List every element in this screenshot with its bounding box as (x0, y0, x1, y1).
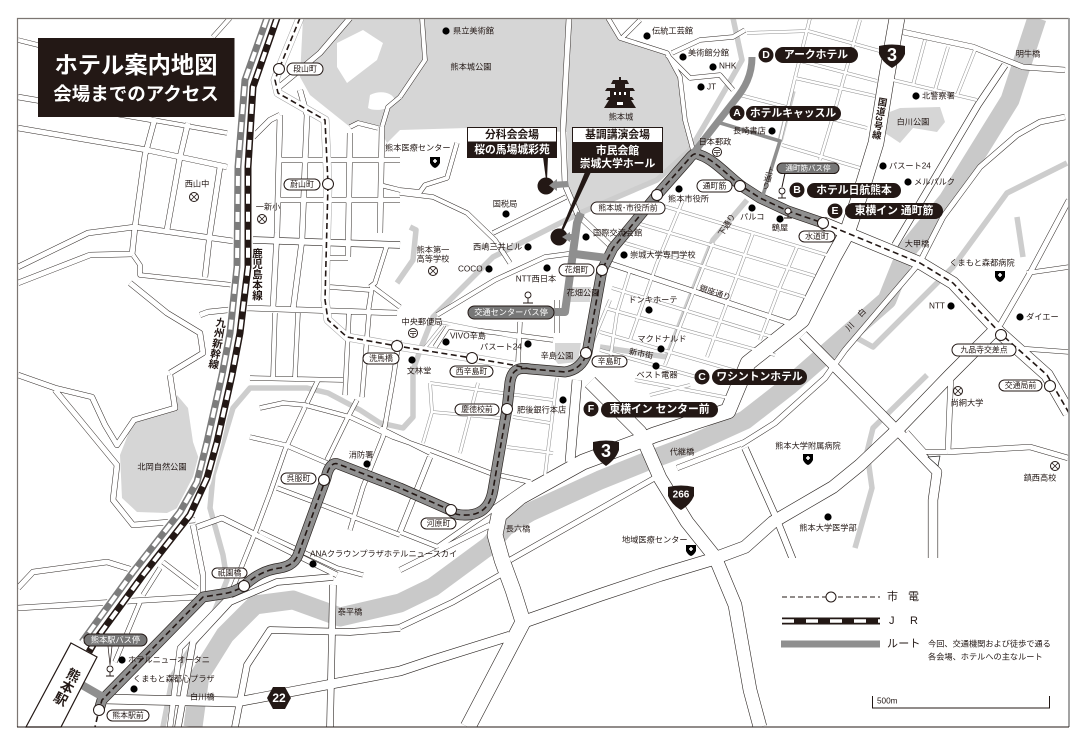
hotel: E 東横イン 通町筋: E (831, 205, 839, 217)
hotel: D アークホテル (758, 47, 858, 63)
POI: 国際交流会館: 国際交流会館 (593, 228, 642, 238)
hotel: D アークホテル: アークホテル (784, 48, 848, 61)
river: Tsuboi and canals (163, 18, 1067, 727)
legend: streetcar: 市 (887, 590, 898, 603)
stop label: 蔚山町: 蔚山町 (290, 179, 314, 189)
park label: 花畑公園: 花畑公園 (567, 288, 599, 298)
POI: 中央郵便局: 中央郵便局 (402, 316, 442, 326)
POI: 鶴屋 (772, 215, 788, 232)
stop label: 段山町 (287, 63, 323, 75)
hotel: F 東横イン センター前: 東横イン センター前 (609, 402, 710, 416)
stop label: 祇園橋: 祇園橋 (218, 568, 241, 578)
legend background (752, 558, 1069, 727)
stop label: 通町筋 (697, 180, 732, 192)
POI: NTT西日本: NTT西日本 (516, 274, 556, 284)
title box (38, 38, 234, 117)
JR Kagoshima main line track (89, 18, 277, 652)
POI: 消防署 (349, 450, 373, 468)
hotel: E 東横イン 通町筋: 東横イン 通町筋 (855, 203, 933, 217)
park: Shirakawa park (885, 107, 945, 143)
POI: ドンキホーテ: ドンキホーテ (628, 296, 678, 304)
POI: 地域医療センター (622, 534, 696, 556)
POI: 文林堂 (407, 356, 431, 376)
POI: ホテルニューオータニ: ホテルニューオータニ (128, 656, 210, 664)
POI: VIVO辛島: VIVO辛島 (450, 330, 486, 340)
POI: 中央郵便局 (402, 316, 442, 338)
park: Kumamoto castle grounds (300, 18, 690, 215)
stop label: 慶徳校前: 慶徳校前 (461, 404, 493, 414)
park: Karashima and Hanabata (555, 287, 591, 364)
stop label: 蔚山町 (284, 179, 320, 190)
stop label: 段山町: 段山町 (293, 64, 317, 74)
route shield: 266 (668, 486, 694, 510)
POI: 熊本第一高等学校: 高等学校 (417, 254, 449, 264)
POI: 熊本第一高等学校: 熊本第一 (417, 244, 449, 254)
hotel: C ワシントンホテル (694, 369, 807, 385)
stop label: 花畑町 (559, 264, 594, 276)
legend: route (781, 638, 921, 650)
river: Shirakawa (193, 18, 1037, 727)
POI: 尚絅大学 (951, 386, 983, 408)
POI: 日本郵政: 日本郵政 (699, 136, 731, 146)
castle icon (604, 77, 636, 108)
POI: 熊本市役所: 熊本市役所 (668, 194, 709, 204)
hotel: B ホテル日航熊本 (790, 182, 901, 198)
POI: 一新小 (256, 202, 280, 224)
hotel: D アークホテル: D (762, 49, 770, 61)
POI: くまもと森都心プラザ: くまもと森都心プラザ (133, 674, 215, 684)
stop label: 辛島町 (592, 356, 627, 367)
park label: 白川公園: 白川公園 (897, 116, 929, 126)
legend: streetcar (782, 590, 919, 603)
POI: 西山中: 西山中 (185, 178, 209, 188)
POI: 伝統工芸館: 伝統工芸館 (652, 26, 693, 36)
title box: ホテル案内地図 (54, 52, 218, 78)
POI: マクドナルド (637, 334, 687, 353)
stop label: 祇園橋 (212, 568, 247, 578)
river label: 白川: 白 (855, 306, 868, 319)
route shield: 3 south (593, 440, 619, 466)
venue label: 分科会会場: 分科会会場 (485, 127, 539, 141)
venue label: 基調講演会場: 市民会館 (596, 143, 639, 157)
bus stop: 交通センターバス停 (468, 292, 554, 319)
POI: 北警察署 (912, 90, 955, 100)
POI: 美術館分館 (679, 48, 729, 61)
bus stop: 熊本駅バス停: 熊本駅バス停 (91, 634, 140, 644)
legend: JR: J (889, 615, 894, 627)
stop label: 水道町 (799, 231, 835, 242)
POI: ANAクラウンプラザホテルニュースカイ (309, 550, 457, 568)
bus stop: 交通センターバス停: 交通センターバス停 (474, 307, 548, 317)
POI: ダイエー (1016, 312, 1059, 322)
route shield: 22: 22 (272, 691, 286, 705)
river label: 白川: 川 (844, 321, 856, 333)
legend: route description: 今回、交通機関および徒歩で通る (928, 638, 1051, 648)
street label: 上通り: 上通り (761, 165, 775, 191)
POI: 伝統工芸館 (643, 26, 693, 40)
park label: 北岡自然公園: 北岡自然公園 (137, 462, 187, 472)
venue label: 基調講演会場: 基調講演会場 (585, 127, 650, 141)
stop label: 熊本駅前: 熊本駅前 (112, 710, 144, 720)
route shield: 3 north: 3 (887, 45, 897, 65)
POI: マクドナルド: マクドナルド (637, 334, 687, 344)
Kumamoto station building (26, 643, 97, 727)
POI: 熊本大学附属病院 (775, 440, 841, 465)
POI: 西嶋三井ビル: 西嶋三井ビル (473, 242, 522, 252)
stop label: 洗馬橋 (363, 353, 399, 364)
bus stop symbol on route (784, 208, 792, 218)
hotel: A ホテルキャッスル: ホテルキャッスル (750, 106, 836, 120)
legend: JR: R (910, 615, 918, 627)
venue marker: 基調講演会場 (550, 172, 591, 246)
route shield: 3 north (879, 44, 905, 68)
legend: streetcar: 電 (908, 590, 919, 603)
route shield: 22 (267, 687, 291, 709)
stop label: 水道町: 水道町 (805, 231, 829, 241)
POI: 崇城大学専門学校: 崇城大学専門学校 (630, 250, 696, 260)
scale bar (872, 696, 1050, 708)
venue label: 基調講演会場: 崇城大学ホール (580, 156, 655, 170)
rail corridor (102, 130, 256, 606)
POI: 熊本大学医学部: 熊本大学医学部 (799, 522, 857, 532)
stop label: 呉服町: 呉服町 (287, 474, 310, 483)
POI: 長崎書店 (733, 126, 776, 136)
castle lawn clearing (337, 30, 395, 110)
POI: NHK: NHK (719, 62, 737, 70)
POI: くまもと森都病院: くまもと森都病院 (949, 258, 1015, 268)
hotel: C ワシントンホテル: ワシントンホテル (716, 370, 803, 383)
stop label: 慶徳校前 (455, 404, 499, 415)
hotel: F 東横イン センター前 (584, 402, 718, 418)
bridge: 泰平橋: 泰平橋 (338, 606, 362, 616)
POI: 熊本大学附属病院: 熊本大学附属病院 (775, 440, 841, 450)
POI: NTT (929, 302, 955, 310)
POI: ベスト電器 (636, 362, 678, 380)
POI: 熊本第一高等学校 (417, 244, 449, 276)
POI: 熊本医療センター (385, 142, 451, 168)
stop label: 熊本城・市役所前: 熊本城･市役所前 (598, 202, 658, 212)
stop label: 河原町 (421, 518, 456, 529)
legend: route description (928, 638, 1051, 662)
POI: 肥後銀行本店: 肥後銀行本店 (517, 404, 566, 414)
bridge: 明牛橋: 明牛橋 (1016, 48, 1040, 58)
castle label: 熊本城 (609, 112, 633, 122)
POI: COCO: COCO (458, 264, 483, 274)
POI: 長崎書店: 長崎書店 (733, 126, 766, 136)
rail label: 九州新幹線: 九州新幹線 (206, 316, 227, 371)
POI: 地域医療センター: 地域医療センター (622, 534, 688, 544)
bus stop: 通町筋バス停: 通町筋バス停 (786, 162, 831, 172)
hotel: B ホテル日航熊本: B (793, 184, 801, 196)
POI: NHK (709, 62, 737, 71)
stop label: 九品寺交差点: 九品寺交差点 (960, 344, 1008, 354)
route highlight (82, 57, 823, 710)
stop label: 花畑町: 花畑町 (565, 264, 588, 274)
POI: 一新小: 一新小 (256, 202, 280, 212)
road label: 国道3号線: 国道3号線 (870, 96, 888, 141)
POI: 熊本医療センター: 熊本医療センター (385, 142, 451, 152)
park label: 熊本城公園: 熊本城公園 (451, 62, 491, 72)
street label: 銀座通り: 銀座通り (698, 283, 732, 302)
legend: route description: 各会場、ホテルへの主なルート (928, 652, 1043, 662)
venue label: 基調講演会場 (572, 127, 663, 173)
POI: 文林堂: 文林堂 (407, 366, 431, 376)
bridge: 白川橋: 白川橋 (190, 692, 215, 702)
POI: くまもと森都心プラザ (130, 674, 215, 693)
POI: 肥後銀行本店 (517, 396, 567, 414)
POI: 鶴屋: 鶴屋 (772, 222, 788, 232)
POI: JT (697, 82, 716, 92)
venue label: 分科会会場 (467, 127, 557, 158)
hotel: A ホテルキャッスル: A (733, 107, 741, 119)
POI: 鎮西高校 (1024, 462, 1060, 482)
park: Kitaoka nature park (120, 395, 200, 513)
stop label: 辛島町: 辛島町 (598, 356, 621, 366)
legend: JR (782, 615, 918, 627)
POI: 国税局 (493, 198, 517, 218)
POI: NTT: NTT (929, 302, 945, 310)
POI: パルコ (740, 204, 764, 222)
stop label: 洗馬橋: 洗馬橋 (369, 353, 393, 363)
bridge: 代継橋: 代継橋 (670, 446, 694, 456)
stop label: 河原町: 河原町 (427, 519, 450, 528)
POI: ANAクラウンプラザホテルニュースカイ: ANAクラウンプラザホテルニュースカイ (310, 550, 457, 558)
POI: 国税局: 国税局 (493, 198, 517, 208)
street label: 下通り: 下通り (716, 212, 737, 238)
POI: ドンキホーテ (628, 296, 678, 314)
hotel: E 東横イン 通町筋 (828, 203, 943, 219)
POI: パルコ: パルコ (740, 212, 764, 222)
stop label: 交通局前 (999, 380, 1042, 391)
stop label: 九品寺交差点 (952, 344, 1016, 356)
POI: 西山中 (185, 178, 209, 202)
park label: 辛島公園: 辛島公園 (541, 350, 573, 360)
scale bar: 500m (877, 696, 898, 706)
legend (781, 590, 1051, 662)
river label: 白川 (844, 306, 868, 333)
POI: くまもと森都病院 (949, 258, 1015, 282)
stop label: 通町筋: 通町筋 (703, 180, 726, 190)
POI: パスート24: パスート24 (480, 342, 522, 352)
bus stop: 熊本駅バス停 (84, 634, 147, 676)
route shield: 266: 266 (673, 490, 690, 500)
bus stop: 通町筋バス停 (777, 162, 839, 198)
POI: 北警察署: 北警察署 (922, 90, 955, 100)
bridge: 長六橋: 長六橋 (506, 524, 530, 534)
JR Kyushu Shinkansen track (82, 18, 267, 642)
POI: 日本郵政 (699, 136, 731, 156)
POI: 国際交流会館 (582, 228, 642, 241)
POI: VIVO辛島 (442, 330, 486, 346)
POI: 熊本市役所 (668, 185, 709, 204)
bridge: 大甲橋: 大甲橋 (905, 238, 929, 248)
stop label: 西辛島町 (450, 366, 493, 377)
stop label: 熊本城・市役所前 (591, 202, 665, 214)
title box: 会場までのアクセス (53, 84, 219, 104)
POI: NTT西日本 (516, 264, 556, 284)
stop label: 呉服町 (281, 473, 316, 484)
venue label: 分科会会場: 桜の馬場城彩苑 (474, 142, 550, 156)
POI: 消防署: 消防署 (349, 450, 373, 460)
POI: 尚絅大学: 尚絅大学 (951, 398, 983, 408)
legend: route: ルート (887, 638, 921, 650)
venue marker: 分科会会場 (538, 157, 569, 194)
stop label: 西辛島町: 西辛島町 (456, 366, 487, 376)
station stops (94, 64, 1056, 716)
POI: ベスト電器: ベスト電器 (636, 370, 678, 380)
POI: 県立美術館: 県立美術館 (453, 26, 494, 36)
POI: パスート24 east: パスート24 (889, 162, 931, 170)
hotel: B ホテル日航熊本: ホテル日航熊本 (816, 182, 892, 196)
stop label: 熊本駅前 (107, 710, 149, 721)
POI: 美術館分館: 美術館分館 (688, 48, 729, 58)
stop label: 交通局前: 交通局前 (1005, 380, 1036, 390)
POI: メルパルク: メルパルク (914, 178, 955, 186)
POI: パスート24 (480, 340, 532, 352)
POI: 鎮西高校: 鎮西高校 (1024, 472, 1056, 482)
route shield: 3 south: 3 (601, 441, 611, 461)
street label: 新市街: 新市街 (628, 346, 654, 361)
hotel: C ワシントンホテル: C (698, 371, 706, 383)
hotel: F 東横イン センター前: F (588, 403, 595, 415)
small traffic triangle (928, 456, 940, 466)
rail label: 鹿児島本線: 鹿児島本線 (251, 247, 263, 301)
POI: JT: JT (707, 82, 716, 92)
Kumamoto station building: 熊本駅 (49, 664, 83, 709)
POI: ダイエー: ダイエー (1026, 312, 1059, 322)
POI: 熊本大学医学部 (799, 513, 857, 532)
hotel: A ホテルキャッスル (730, 106, 841, 121)
